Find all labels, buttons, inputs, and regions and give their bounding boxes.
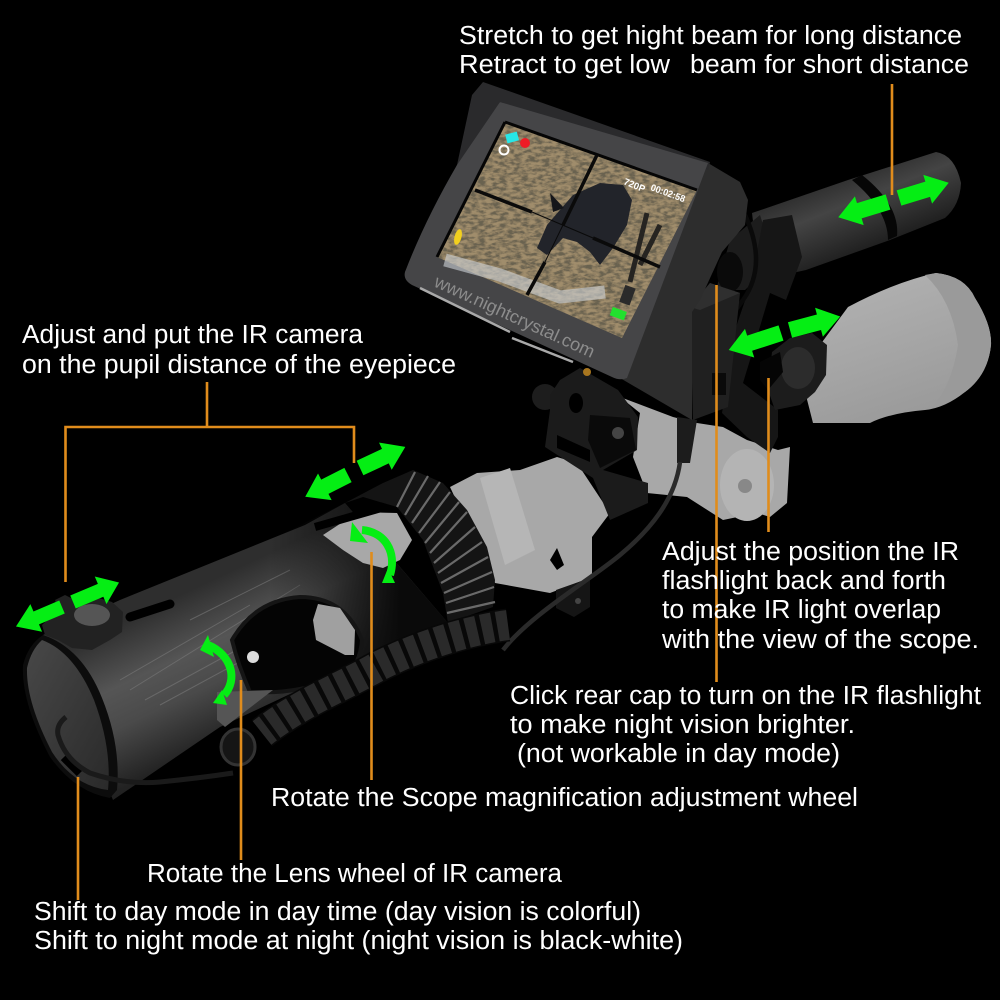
ribbed focus ring: [345, 470, 495, 623]
caption: scope magnification: Rotate the Scope magnification adjustment wheel: [271, 784, 858, 812]
caption: day night mode: [34, 898, 683, 955]
caption: rear cap: [510, 682, 981, 768]
scope adjustment knob: [760, 333, 827, 410]
monitor lower edge highlight: [420, 288, 573, 362]
caption: IR camera distance: Adjust and put the IR camera: [22, 321, 364, 349]
rifle scope central turret (grey): [620, 397, 790, 521]
caption: flashlight beam: beam for short distance: [690, 51, 969, 79]
leader: flashlight position: [767, 378, 770, 532]
arrow: scope wheel rotation: [350, 522, 395, 583]
monitor power cable: [503, 462, 680, 650]
arrow: flashlight right: [895, 168, 953, 212]
arrow: knob left: [724, 319, 786, 364]
coiled remote cable: [58, 625, 508, 783]
rifle scope objective (grey): [790, 273, 991, 443]
tube dark end: [270, 503, 448, 700]
arrow: camera knob left: [10, 593, 68, 640]
end cap: [23, 635, 118, 798]
crosshair thin centre: [532, 212, 593, 262]
tube slot: [130, 604, 170, 617]
caption: IR camera distance: on the pupil distance of the eyepiece: [22, 351, 456, 379]
screen readout: 00:02:58: [649, 182, 687, 205]
lens window: [217, 597, 362, 727]
scope eyepiece (grey): [450, 457, 610, 593]
callout leader lines: [66, 84, 892, 900]
monitor video connector: [677, 417, 697, 463]
screen readout: [622, 177, 687, 205]
leader: flashlight stretch: [891, 84, 893, 195]
tube body: [43, 503, 448, 800]
leader: day night switch: [77, 777, 79, 900]
boar ear: [550, 193, 564, 212]
caption: day night mode: Shift to night mode at night (night vision is black-white): [34, 927, 683, 955]
monitor: [405, 82, 748, 420]
crosshair: [475, 155, 660, 295]
leader: scope magnification wheel: [370, 552, 373, 780]
caption: flashlight beam: Stretch to get hight beam for long distance: [459, 22, 962, 50]
leader: IR camera pupil distance bracket: [66, 382, 354, 582]
arrow: knob right: [786, 302, 844, 344]
monitor website text: www.nightcrystal.com: [430, 271, 598, 362]
caption: flashlight position: flashlight back and forth: [662, 567, 946, 595]
caption: flashlight position: to make IR light overlap: [662, 596, 941, 624]
monitor front bezel: [405, 102, 708, 379]
IR camera tube: [23, 470, 495, 800]
top window with scope lens: [315, 507, 412, 568]
caption: IR camera distance: [22, 321, 456, 379]
arrow: camera top right: [354, 433, 412, 482]
arrow: flashlight left: [834, 188, 892, 232]
caption: rear cap: to make night vision brighter.: [510, 711, 855, 739]
scope mount bracket: [556, 578, 590, 617]
arrow: camera knob right: [67, 569, 125, 616]
monitor battery box: [690, 283, 740, 420]
thumb screw: [42, 595, 123, 650]
caption: rear cap: (not workable in day mode): [517, 740, 840, 768]
leader: flashlight rear cap: [715, 285, 718, 682]
monitor screen photo: [437, 122, 697, 338]
green adjustment arrows: [10, 168, 953, 705]
monitor rear housing: [620, 163, 748, 420]
caption: flashlight position: with the view of the scope.: [661, 626, 979, 654]
boar: [537, 183, 632, 265]
caption: flashlight beam: [459, 22, 969, 79]
tube brushed streaks: [120, 570, 310, 705]
arrow: lens wheel rotation: [200, 635, 231, 705]
monitor hood: [405, 82, 710, 272]
arrow: camera top left: [298, 462, 355, 510]
tree trunk: [630, 213, 660, 282]
screen readout: 720P: [622, 177, 647, 195]
IR flashlight: [716, 152, 961, 292]
caption: flashlight beam: Retract to get low: [459, 51, 671, 79]
rail mount: [532, 368, 648, 520]
leader: lens wheel: [240, 680, 242, 860]
caption: flashlight position: [661, 538, 979, 654]
day night switch: [64, 757, 80, 773]
snow patches: [445, 260, 605, 297]
flashlight clamp and mount arm: [670, 215, 802, 453]
caption: flashlight position: Adjust the position the IR: [662, 538, 959, 566]
caption: lens wheel: Rotate the Lens wheel of IR camera: [147, 860, 563, 888]
screen icons: [453, 132, 636, 320]
caption: day night mode: Shift to day mode in day time (day vision is colorful): [34, 898, 641, 926]
caption: rear cap: Click rear cap to turn on the IR flashlight: [510, 682, 981, 710]
